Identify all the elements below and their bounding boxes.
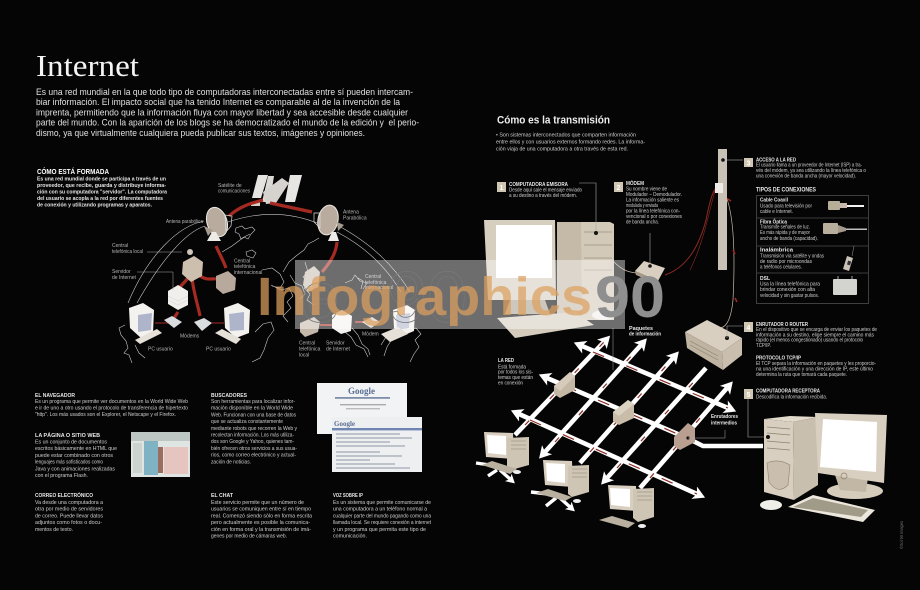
diagram labels: Central [112, 243, 128, 249]
diagram labels: internacional [234, 270, 262, 276]
text block: buscadores [211, 393, 297, 465]
label: paquetes de información: de información [629, 331, 661, 337]
step 4: enrutador o router: TCP/IP. [756, 343, 771, 349]
label: enrutadores intermedios: Enrutadores [711, 414, 738, 420]
text block: el chat [211, 493, 312, 540]
diagram labels: Servidor [326, 340, 345, 346]
text block: el navegador: EL NAVEGADOR [35, 393, 75, 399]
icon: right side user PC [381, 305, 415, 342]
text block: el chat: Este servicio permite que un número de [211, 500, 304, 506]
text block: la página o sitio web: puede estar combinado con otros [35, 453, 113, 459]
screenshot: google home page: Google [348, 386, 375, 396]
diagram labels: de Internet [112, 275, 137, 281]
intro paragraph: parte del mundo. Con la aparición de los blogs se ha democratizado el mundo de la edición y el perio- [36, 118, 419, 129]
screenshot: website [131, 432, 190, 477]
icon: user PC middle [215, 303, 250, 344]
icon: right side server [332, 310, 352, 334]
text block: el navegador: Es un programa que permite ver documentos en la World Wide Web [35, 399, 188, 405]
text block: voz sobre IP: llamada local. Se requiere conexión a internet [333, 520, 431, 526]
heading: cómo es la transmisión: Cómo es la transmisión [497, 114, 610, 126]
diagram labels: Central [365, 274, 381, 280]
label: paquetes de información [613, 326, 661, 370]
text block: voz sobre IP: una computadora a un teléfono normal a [333, 507, 427, 513]
step 3: acceso a la red [744, 158, 866, 180]
small PC 1 [482, 432, 529, 474]
text block: cómo está formada: CÓMO ESTÁ FORMADA [37, 167, 109, 176]
row: cable coaxil: cable e Internet. [760, 209, 793, 215]
icon: satellite [251, 175, 302, 206]
diagram labels: telefónica [365, 280, 387, 286]
step 5: computadora receptora [744, 389, 827, 437]
step 1: computadora emisora: COMPUTADORA EMISORA [509, 182, 568, 188]
step 1: computadora emisora [497, 182, 598, 235]
text block: voz sobre IP [333, 493, 431, 540]
row: DSL: DSL [760, 276, 771, 282]
screenshot: google results page: Google [334, 420, 355, 428]
signal path: red arcs [155, 200, 365, 325]
icon: right side exchange and dish base [300, 266, 320, 337]
diagram labels [112, 183, 393, 358]
diagram labels: Antena [343, 210, 359, 216]
step 4: enrutador o router: ENRUTADOR O ROUTER [756, 322, 808, 328]
text block: buscadores: rios, como correo electrónico y actual- [211, 453, 296, 459]
heading: cómo es la transmisión [496, 114, 645, 152]
text block: correo electrónico: de correo. Puede llevar datos [35, 513, 103, 519]
step 2: módem: Su nombre viene de [626, 186, 667, 192]
data packets: red dashes [525, 342, 728, 494]
text block: protocolo TCP/IP: PROTOCOLO TCP/IP [756, 355, 801, 361]
icon: internet server left [168, 285, 188, 310]
row: fibra óptica [760, 217, 867, 242]
diagram labels: PC usuario [206, 346, 231, 352]
row: inalámbrica [760, 246, 854, 271]
intro paragraph: biar información. El impacto social que ha tenido Internet es comparable al de la invención de la [36, 97, 401, 108]
text block: el chat: usuarios se comuniquen entre sí en tiempo [211, 507, 311, 513]
diagram labels: Central [299, 340, 315, 346]
diagram labels: Antena parabólica [166, 219, 203, 225]
intro paragraph [36, 87, 419, 139]
label: enrutadores intermedios [688, 414, 738, 438]
panel: tipos de conexiones: TIPOS DE CONEXIONES [756, 186, 816, 194]
icon: intermediate router 2 [613, 400, 634, 425]
watermark: 90 [387, 258, 467, 338]
text block: cómo está formada: del usuario se acopla a la red por diferentes fuentes [37, 196, 163, 202]
text block: buscadores: recolectan información. Los más utiliza- [211, 432, 294, 438]
intro paragraph: dismo, ya que virtualmente cualquiera pueda publicar sus textos, imágenes y opiniones. [36, 128, 365, 139]
diagram labels: local [299, 352, 309, 358]
text block: buscadores: Son herramientas para localizar infor- [211, 399, 295, 405]
text block: el chat: pero actualmente es posible la comunica- [211, 520, 310, 526]
panel: tipos de conexiones [756, 186, 868, 304]
step 2: módem: de banda ancha. [626, 220, 659, 226]
diagram labels: de Internet [326, 346, 351, 352]
text block: buscadores: BUSCADORES [211, 393, 247, 399]
step 5: computadora receptora: Descodifica la información recibida. [756, 394, 827, 400]
intro paragraph: Es una red mundial en la que todo tipo de computadoras interconectadas entre sí pueden intercam- [36, 87, 413, 98]
row: inalámbrica: Inalámbrica [760, 248, 794, 254]
step 4: enrutador o router: rápido (el menos congestionado) usando el protocolo [756, 338, 863, 344]
heading: cómo es la transmisión: • Son sistemas interconectados que comparten información [496, 133, 636, 139]
icon: receiving computer [760, 413, 887, 522]
step 2: módem: modulada y enviada [626, 203, 658, 209]
icon: sending computer [484, 220, 616, 338]
row: inalámbrica: a teléfonos celulares. [760, 264, 802, 270]
text block: la página o sitio web: con el programa Flash. [35, 473, 88, 479]
text block: la red [498, 358, 533, 386]
text block: la red: por todos los sis- [498, 370, 533, 376]
step 2: módem: La información saliente es [626, 198, 679, 204]
text block: la red: Está formada [498, 364, 526, 370]
text block: cómo está formada: de conexión y utilizando programas y aparatos. [37, 202, 152, 208]
watermark: Infographics [257, 267, 592, 327]
text block: buscadores: zación de noticias. [211, 459, 251, 465]
text block: voz sobre IP: y un programa que permita este tipo de [333, 527, 426, 533]
row: fibra óptica: Transmite señales de luz. [760, 224, 810, 230]
text block: buscadores: mación disponible en la World Wide [211, 406, 293, 412]
text block: la página o sitio web: LA PÁGINA O SITIO WEB [35, 432, 100, 439]
text block: voz sobre IP: VOZ SOBRE IP [333, 493, 363, 499]
text block: el chat: ción en forma oral y la transmisión de imá- [211, 527, 311, 533]
row: DSL: brindar conexión con alta [760, 287, 815, 293]
diagram labels: Servidor [112, 269, 131, 275]
text block: correo electrónico: adjuntos como fotos o docu- [35, 520, 102, 526]
small PC 2 [536, 460, 589, 503]
text block: la página o sitio web: lenguajes más sofisticados como [35, 460, 103, 466]
text block: el navegador: e ir de uno a otro usando el protocolo de transferencia de hipertexto [35, 406, 188, 412]
text block: cómo está formada: ción con su computadora "servidor". La computadora [37, 190, 168, 196]
step 4: enrutador o router: En el dispositivo que se encarga de enviar los paquetes de [756, 327, 877, 333]
step 2: módem [614, 179, 682, 266]
row: DSL: velocidad y sin gastar pulsos. [760, 293, 819, 299]
icon: modem [635, 261, 665, 284]
diagram labels: telefónica local [112, 249, 143, 255]
network diagram: how the internet is formed [112, 175, 421, 363]
text block: protocolo TCP/IP: El TCP separa la información en paquetes y les proporcio- [756, 361, 876, 367]
step 2: módem: por la línea telefónica con- [626, 208, 680, 214]
diagram labels: comunicaciones [218, 188, 250, 194]
icon: pole [715, 149, 743, 270]
row: cable coaxil [760, 198, 864, 215]
text block: buscadores: mediante robots que recorren la Web y [211, 426, 297, 432]
step 2: módem: 2 [616, 185, 620, 192]
step 1: computadora emisora: 1 [500, 185, 504, 192]
title: Internet [36, 48, 139, 83]
text block: el chat: EL CHAT [211, 493, 234, 499]
row: fibra óptica: Es más rápida y de mayor [760, 230, 810, 236]
label: paquetes de información: Paquetes [629, 326, 653, 332]
text block: cómo está formada: Es una red mundial donde se participa a través de un [37, 176, 166, 182]
text block: buscadores: dos son Google y Yahoo, quienes tam- [211, 439, 294, 445]
text block: la página o sitio web: Es un conjunto de documentos [35, 440, 107, 446]
cables: modem to pole [614, 188, 737, 328]
icon: intermediate router 3 [674, 423, 695, 450]
text block: la página o sitio web [35, 432, 117, 479]
step 3: acceso a la red: ACCESO A LA RED [756, 158, 796, 164]
globe arcs and continents [119, 214, 421, 363]
text block: el chat: real. Comenzó siendo sólo en forma escrita [211, 513, 312, 519]
step 3: acceso a la red: una conexión de banda ancha (mayor velocidad). [756, 174, 856, 180]
heading: cómo es la transmisión: entre ellos y con usuarios externos formando redes. La informa- [496, 140, 645, 146]
row: DSL: Usa la línea telefónica para [760, 282, 820, 288]
icon: parabolic antenna right [314, 203, 344, 241]
watermark: e [300, 258, 340, 338]
label: enrutadores intermedios: intermedios [711, 420, 737, 426]
row: cable coaxil: Usado para televisión por [760, 203, 812, 209]
text block: la red: temas que están [498, 375, 533, 381]
text block: voz sobre IP: cualquier parte del mundo pagando como una [333, 513, 431, 519]
step 4: enrutador o router: información a su destino, elige siempre el camino más [756, 332, 874, 338]
icon: modems left [164, 316, 212, 331]
text block: la red: LA RED [498, 358, 514, 364]
step 3: acceso a la red: vés del módem, ya sea utilizando la línea telefónica o [756, 168, 866, 174]
text block: buscadores: que se actualiza constantemente [211, 419, 283, 425]
text block: el navegador: "http". Los más usados son el Explorer, el Netscape y el Firefox. [35, 412, 176, 418]
step 2: módem: MÓDEM [626, 179, 644, 187]
row: fibra óptica: Fibra Óptica [760, 217, 788, 225]
text block: el navegador [35, 393, 188, 418]
diagram labels: Central [234, 258, 250, 264]
diagram labels: PC usuario [148, 346, 173, 352]
text block: correo electrónico: otra por medio de servidores [35, 507, 103, 513]
row: inalámbrica: de radio por microondas [760, 259, 812, 265]
icon: user PC left [129, 303, 162, 344]
icon: parabolic antenna left [203, 205, 232, 241]
step 5: computadora receptora: 5 [746, 392, 750, 399]
screenshot: google home page [317, 383, 407, 434]
step 2: módem: Modulador – Demodulador. [626, 192, 682, 198]
watermark: 90 [595, 265, 665, 330]
row: fibra óptica: ancho de banda (capacidad). [760, 236, 818, 242]
step 1: computadora emisora: Desde aquí sale el mensaje enviado [509, 188, 582, 194]
row: cable coaxil: Cable Coaxil [760, 198, 788, 204]
diagram labels: telefónica [299, 346, 321, 352]
icon: right side modem [362, 317, 380, 328]
text block: correo electrónico: Va desde una computadora a [35, 500, 103, 506]
diagram labels: Módems [180, 334, 200, 340]
text block: la página o sitio web: escritos básicamente en HTML que [35, 446, 117, 452]
network: arrows grid [476, 342, 763, 507]
text block: correo electrónico: CORREO ELECTRÓNICO [35, 491, 94, 499]
small PC 3 [599, 485, 654, 528]
intro paragraph: imprenta, permitiendo que la información fluya con mayor libertad y sea accesible desde cualquier [36, 107, 408, 118]
watermark [257, 258, 665, 338]
icon: main router [685, 320, 743, 370]
text block: voz sobre IP: comunicación. [333, 534, 367, 540]
text block: el chat: genes por medio de cámaras web. [211, 534, 287, 540]
step 5: computadora receptora: COMPUTADORA RECEPTORA [756, 389, 820, 395]
icon: international exchange left [216, 271, 236, 294]
text block: cómo está formada: proveedor, que recibe, guarda y distribuye informa- [37, 183, 166, 189]
text block: correo electrónico: mentos de texto. [35, 527, 73, 533]
step 2: módem: vencional o por conexiones [626, 214, 682, 220]
text block: protocolo TCP/IP [756, 355, 876, 378]
step 1: computadora emisora: a su destino a través del módem. [509, 193, 577, 199]
text block: la red: en conexión [498, 380, 523, 386]
diagram labels: Parabólica [343, 216, 367, 222]
step 4: enrutador o router [744, 322, 877, 349]
icon: local telephone exchange left [182, 249, 203, 282]
heading: cómo es la transmisión: ción viaja de una computadora a otra través de esta red. [496, 146, 628, 152]
diagram labels: internacional [365, 285, 393, 291]
step 4: enrutador o router: 4 [746, 325, 750, 332]
text block: voz sobre IP: Es un sistema que permite comunicarse de [333, 500, 431, 506]
diagram labels: Módem [362, 332, 379, 338]
text block: la página o sitio web: Java y con animaciones realizadas [35, 466, 115, 472]
text block: buscadores: bién ofrecen otros servicios a sus usua- [211, 446, 297, 452]
step 3: acceso a la red: 3 [746, 160, 750, 168]
icon: intermediate router 1 [554, 372, 575, 398]
diagram labels: Satélite de [218, 183, 242, 189]
text block: correo electrónico [35, 491, 103, 533]
text block: cómo está formada [37, 167, 168, 208]
row: DSL [760, 276, 857, 299]
screenshot: google results page [332, 417, 422, 472]
text block: protocolo TCP/IP: na una identificación y una dirección de IP, este último [756, 366, 873, 372]
diagram labels: telefónica [234, 264, 256, 270]
row: inalámbrica: Transmisión vía satélite y ondas [760, 253, 824, 259]
text block: protocolo TCP/IP: determina la ruta que tomará cada paquete. [756, 372, 847, 378]
text block: buscadores: Web. Funcionan con una base de datos [211, 412, 296, 418]
credit: ©Sol 90 Images [898, 520, 904, 549]
step 3: acceso a la red: El usuario llama a un proveedor de Internet (ISP) a tra- [756, 162, 862, 168]
